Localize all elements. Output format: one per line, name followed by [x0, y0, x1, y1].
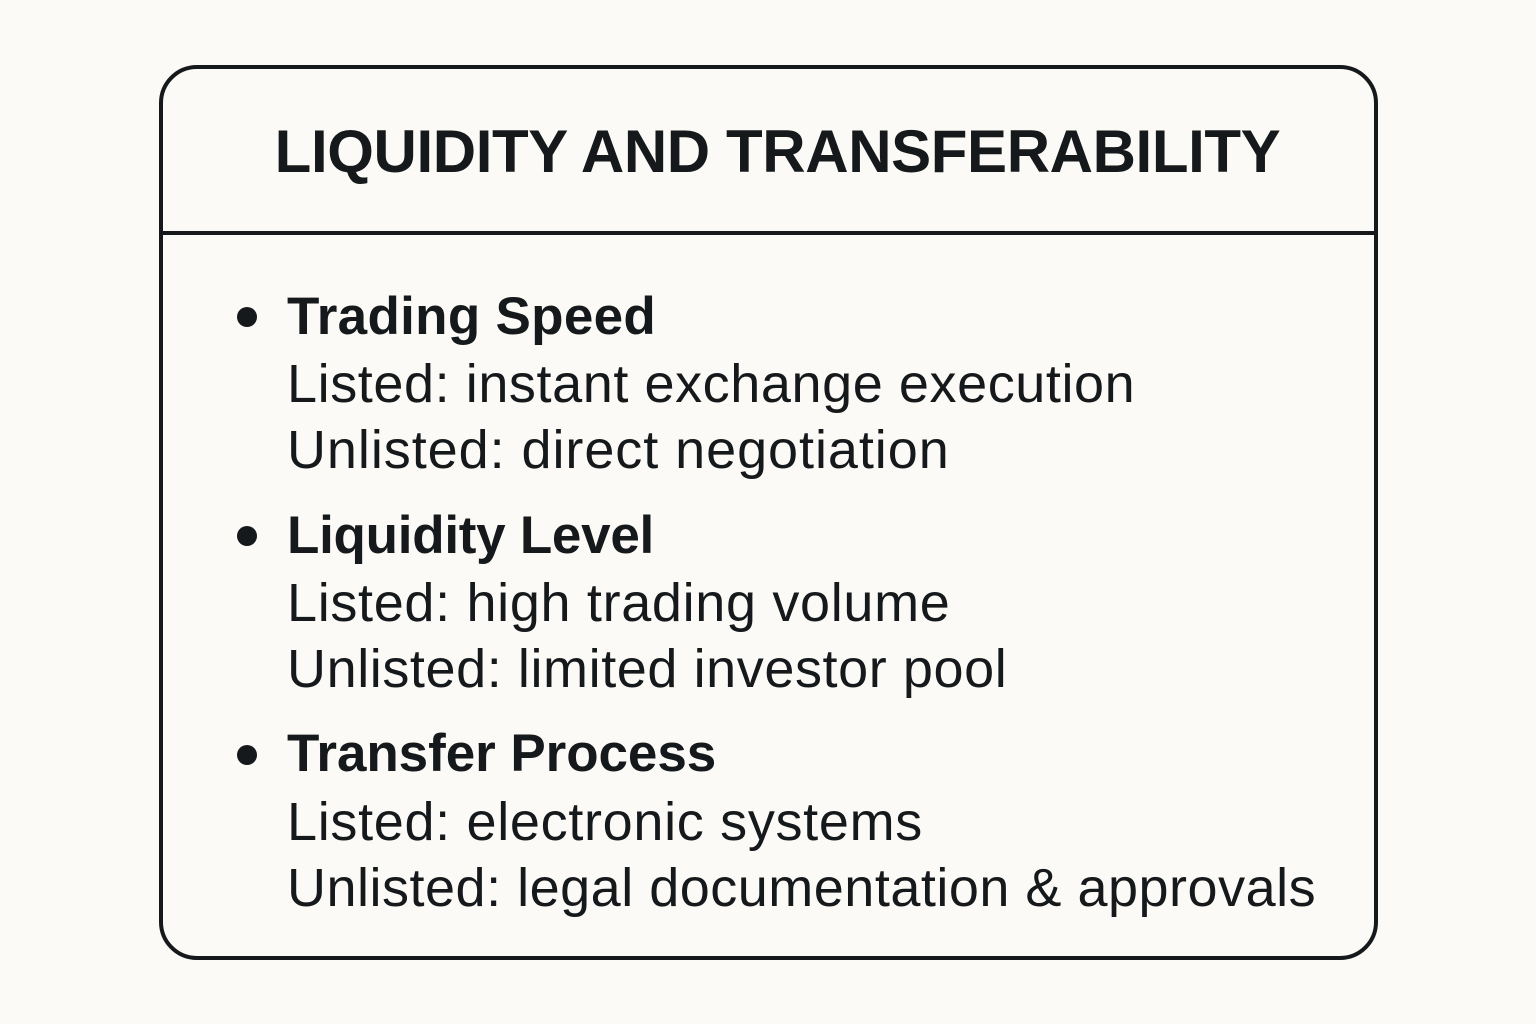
heading: liquidity level: Liquidity Level: [287, 506, 654, 565]
panel: liquidity and transferability card: [159, 65, 1378, 960]
title: LIQUIDITY AND TRANSFERABILITY: [275, 118, 1280, 185]
text: unlisted trading speed: Unlisted: direct negotiation: [287, 420, 950, 480]
text: unlisted transfer: Unlisted: legal documentation & approvals: [287, 858, 1316, 918]
heading: trading speed: Trading Speed: [287, 287, 656, 346]
text: listed liquidity: Listed: high trading volume: [287, 573, 950, 633]
text: listed trading speed: Listed: instant exchange execution: [287, 354, 1135, 414]
bullet: [237, 526, 257, 546]
bullet: [237, 745, 257, 765]
text: listed transfer: Listed: electronic systems: [287, 792, 923, 852]
header divider: [161, 231, 1376, 235]
bullet: [237, 307, 257, 327]
text: unlisted liquidity: Unlisted: limited investor pool: [287, 639, 1007, 699]
heading: transfer process: Transfer Process: [287, 724, 716, 783]
